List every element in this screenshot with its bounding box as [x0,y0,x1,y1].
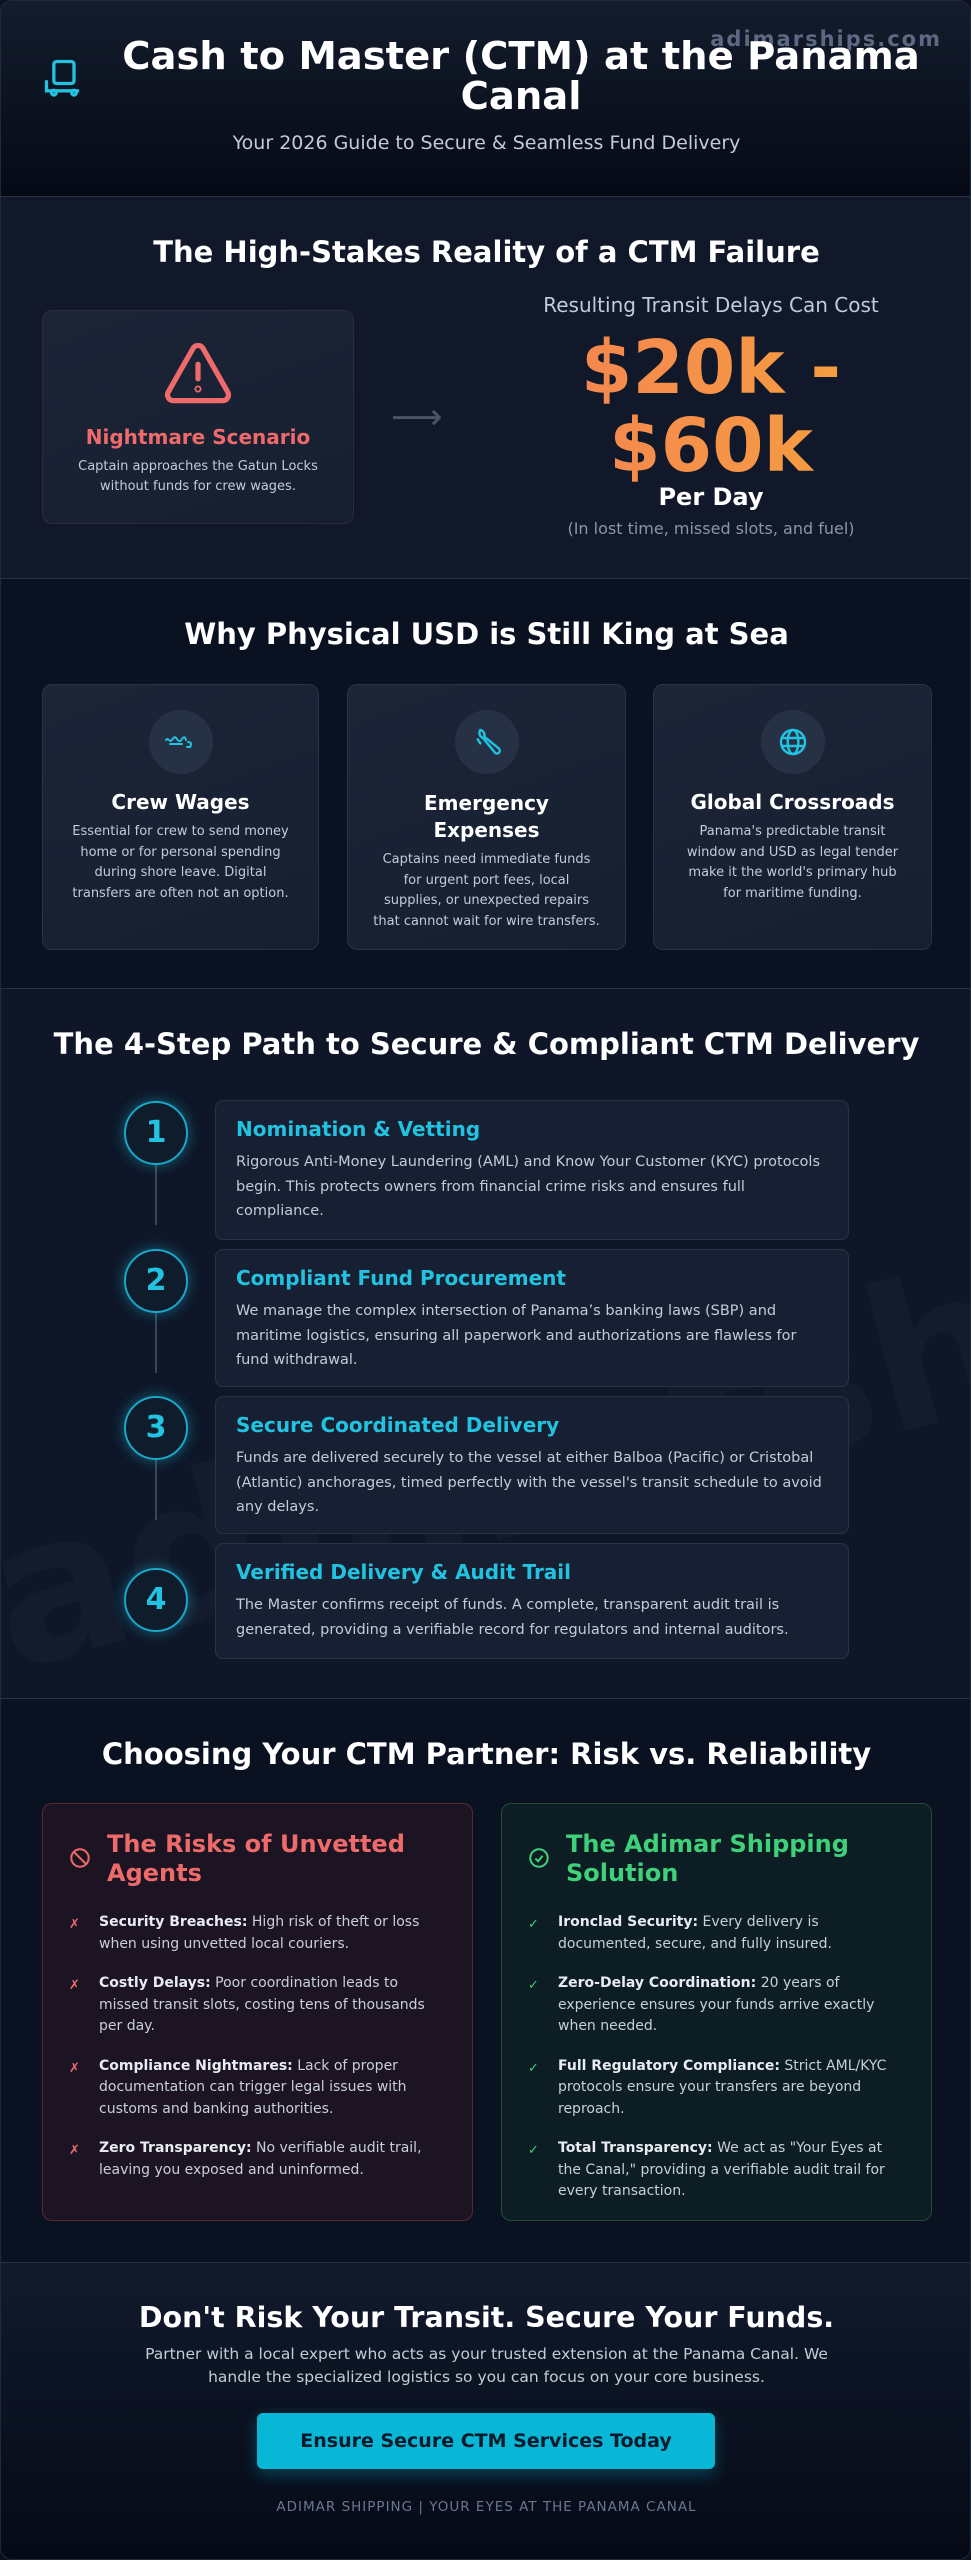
panel: risks: Compliance Nightmares: Lack of proper documentation can trigger legal issues with customs and banking authorities. [99,2058,407,2116]
card: nightmare scenario [42,310,354,524]
step 4 number: 4 [146,1582,166,1617]
card: emergency expenses: for urgent port fees, local [404,872,569,888]
panel: adimar solution: Full Regulatory Compliance: Strict AML/KYC protocols ensure your transfers are beyond reproach. [558,2058,886,2116]
subtitle: Your 2026 Guide to Secure & Seamless Fund Delivery [233,132,740,154]
section: call to action [1,2263,971,2560]
step 1 number [124,1101,188,1165]
stat: cost per day: $60k [609,403,813,489]
step 4 [215,1543,849,1659]
card: global crossroads [653,684,932,950]
card: nightmare scenario: without funds for crew wages. [100,479,296,494]
panel: adimar solution: ✓ [528,2060,539,2076]
heading: The High-Stakes Reality of a CTM Failure [153,235,820,269]
panel: adimar solution: Zero-Delay Coordination: 20 years of experience ensures your funds arrive exactly when needed. [558,1975,874,2034]
header [1,1,971,197]
solution heading: The Adimar Shipping Solution [566,1830,849,1887]
panel: adimar solution: Ironclad Security: Every delivery is documented, secure, and fully insured. [558,1914,832,1952]
panel: adimar solution: ✓ [528,2143,539,2158]
icon: globe [760,710,824,774]
button [257,2413,715,2469]
stat: cost per day: Resulting Transit Delays Can Cost [543,293,879,317]
card: crew wages: Crew Wages [111,790,250,814]
section: high-stakes [1,197,971,579]
button: Ensure Secure CTM Services Today [300,2430,672,2452]
step 3: Funds are delivered securely to the vessel at either Balboa (Pacific) or Cristobal (Atlantic) anchorages, timed perfectly with the vessel's transit schedule to avoid any delays. [236,1450,822,1515]
panel: risks: Security Breaches: High risk of theft or loss when using unvetted local couriers. [99,1914,419,1952]
card: emergency expenses: Captains need immediate funds [383,852,590,867]
heading: Why Physical USD is Still King at Sea [184,617,789,651]
title: Cash to Master (CTM) at the Panama Canal [122,34,920,119]
card: emergency expenses [347,684,626,950]
stat: cost per day [543,293,879,538]
panel: adimar solution: ✓ [528,1978,539,1993]
panel: adimar solution: ✓ [528,1917,539,1932]
cta heading: Don't Risk Your Transit. Secure Your Funds. [139,2301,834,2334]
card: nightmare scenario: Nightmare Scenario [86,425,310,449]
card: emergency expenses: that cannot wait for wire transfers. [373,914,600,928]
panel: risks: ✗ [69,1917,80,1932]
step 4: The Master confirms receipt of funds. A complete, transparent audit trail is generated, providing a verifiable record for regulators and internal auditors. [236,1597,789,1638]
heading: Choosing Your CTM Partner: Risk vs. Reliability [102,1737,871,1771]
panel: risks: ✗ [69,2060,80,2076]
stat: cost per day: Per Day [658,483,764,511]
card: global crossroads: Panama's predictable transit window and USD as legal tender make it the world's primary hub for maritime funding. [687,824,898,900]
step 2 number [124,1249,188,1313]
panel: risks: Costly Delays: Poor coordination leads to missed transit slots, costing tens of thousands per day. [99,1975,425,2034]
card: nightmare scenario: Captain approaches the Gatun Locks [78,459,318,474]
step 2: We manage the complex intersection of Panama’s banking laws (SBP) and maritime logistics, ensuring all paperwork and authorizations are flawless for fund withdrawal. [236,1303,796,1368]
step 3 number: 3 [146,1410,166,1445]
panel: risks: ✗ [69,1978,80,1993]
section: choosing partner [1,1699,971,2263]
cta text: Partner with a local expert who acts as your trusted extension at the Panama Canal. We handle the specialized logistics so you can focus on your core business. [145,2345,828,2386]
arrow: ⟶ [391,397,443,438]
icon: wrench [454,710,518,774]
watermark url: adimarships.com [710,27,942,51]
step 3 [215,1396,849,1534]
step 4 number [124,1568,188,1632]
step 1: Nomination & Vetting [236,1117,480,1141]
step 1 [215,1100,849,1240]
icon: warning [164,342,232,404]
panel: risks: Zero Transparency: No verifiable audit trail, leaving you exposed and uninformed. [99,2140,422,2178]
step 1 number: 1 [146,1115,166,1150]
stat: cost per day: (In lost time, missed slots, and fuel) [567,519,855,538]
card: emergency expenses: Emergency [424,791,549,815]
risks heading: The Risks of Unvetted Agents [107,1830,405,1887]
footer: ADIMAR SHIPPING | YOUR EYES AT THE PANAMA CANAL [276,2499,697,2515]
step 2 [215,1249,849,1387]
card: crew wages [42,684,319,950]
section: 4-step path [1,989,971,1699]
panel: risks [42,1803,473,2221]
panel: adimar solution: Total Transparency: We act as "Your Eyes at the Canal," providing a verifiable audit trail for every transaction. [558,2140,885,2199]
section: why physical USD [1,579,971,989]
heading: The 4-Step Path to Secure & Compliant CTM Delivery [54,1027,919,1061]
panel: risks: ✗ [69,2143,80,2158]
card: global crossroads: Global Crossroads [690,790,895,814]
card: emergency expenses: Expenses [433,818,540,842]
icon: money [148,710,212,774]
step 3: Secure Coordinated Delivery [236,1413,559,1437]
step 3 number [124,1396,188,1460]
step 4: Verified Delivery & Audit Trail [236,1560,571,1584]
card: emergency expenses: supplies, or unexpected repairs [384,893,589,908]
step 2: Compliant Fund Procurement [236,1266,566,1290]
icon: cash cart [44,60,80,97]
card: crew wages: Essential for crew to send money home or for personal spending during shore leave. Digital transfers are often not an option. [72,824,289,900]
stat: cost per day: $20k - [581,325,841,411]
step 2 number: 2 [146,1263,166,1298]
step 1: Rigorous Anti-Money Laundering (AML) and Know Your Customer (KYC) protocols begin. This protects owners from financial crime risks and ensures full compliance. [236,1154,820,1219]
panel: adimar solution [501,1803,932,2221]
